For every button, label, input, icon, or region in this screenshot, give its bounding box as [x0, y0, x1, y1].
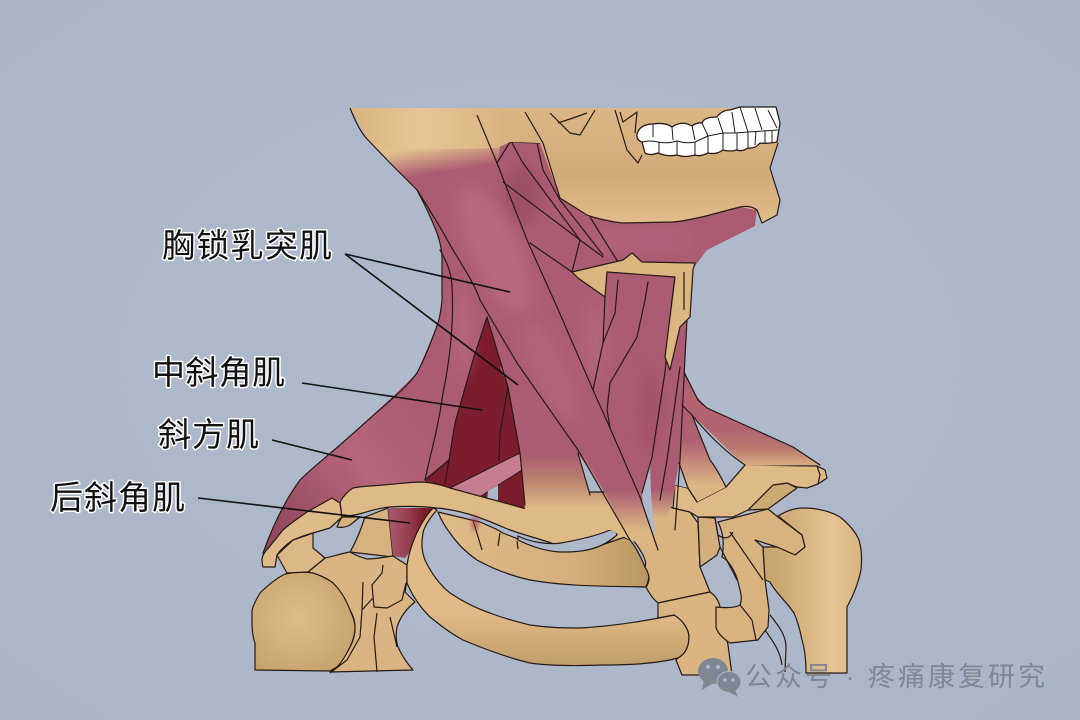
skull to muscle fade: [378, 147, 500, 190]
outline: right trapezius: [698, 400, 820, 465]
thyroid inner line: [683, 272, 685, 310]
outline: digastric group: [497, 142, 618, 272]
outline: SCM front: [497, 163, 658, 550]
pointer: sternocleidomastoid upper: [345, 254, 510, 292]
bone: sternal column upper: [625, 500, 710, 603]
bone: left scapula process: [308, 552, 415, 672]
pointer: posterior scalene: [198, 498, 410, 523]
bone: right band and lower rib: [716, 509, 805, 643]
rib band lines: [715, 518, 763, 640]
bone: right clavicle: [673, 465, 827, 517]
bone: acromion: [262, 498, 342, 567]
muscle: strap strip fade: [642, 372, 685, 538]
bone: hyoid and thyroid cartilage: [572, 253, 695, 370]
bone: first rib: [438, 512, 649, 587]
scapula detail lines: [330, 565, 406, 673]
first rib hash lines: [473, 520, 518, 550]
gap: right triangle: [692, 415, 745, 487]
outline: neck and trapezius outer: [263, 190, 442, 553]
muscles behind bones: [262, 135, 757, 562]
gap: small triangle near clavicle: [675, 463, 688, 488]
outline: splenius: [425, 250, 453, 480]
bone: left humeral head: [252, 572, 355, 671]
bone: second rib: [407, 508, 689, 666]
label: posterior scalene: 后斜角肌: [50, 479, 185, 516]
pointer: sternocleidomastoid lower: [345, 254, 518, 385]
muscle outlines: [263, 142, 820, 553]
bone: clavicle: [340, 482, 632, 550]
head: [350, 107, 780, 370]
pointer: trapezius: [272, 440, 352, 460]
outline: gap right triangle: [679, 415, 745, 502]
icon: wechat watermark: [698, 658, 741, 697]
muscle: dark red triangle low: [425, 460, 449, 492]
bone: right humerus: [763, 508, 862, 673]
label: trapezius: 斜方肌: [158, 416, 259, 453]
label: middle scalene: 中斜角肌: [152, 354, 285, 391]
watermark text: 公众号 · 疼痛康复研究: [745, 662, 1045, 692]
gap: slivers near first rib: [482, 523, 500, 535]
bone: scapular strip: [350, 508, 393, 557]
gap: sliver between clavicle and first rib: [518, 530, 617, 552]
outline: head: [350, 108, 780, 223]
small lower ligament lines: [765, 615, 786, 672]
soft muscle light and dark patches: [458, 168, 662, 431]
bone: manubrium lower: [658, 592, 732, 675]
muscle: second band right: [679, 405, 726, 502]
teeth: [637, 107, 780, 156]
muscle: middle scalene dark red: [437, 317, 525, 510]
outline: dark red edges: [425, 317, 525, 505]
label: sternocleidomastoid: 胸锁乳突肌: [162, 227, 332, 264]
skull socket and ramus lines: [550, 110, 642, 163]
gap: narrow sliver by sternum: [642, 462, 655, 538]
bones group: [252, 465, 862, 675]
bone: mandible: [505, 108, 780, 223]
neck anatomy illustration: [50, 106, 1044, 697]
muscle: trapezius right: [682, 380, 820, 466]
outline: SCM rear: [417, 190, 630, 540]
muscle: anterior scalene pink band: [450, 453, 522, 498]
outline: strap muscles: [593, 277, 698, 530]
outline: clavicular gap lines: [578, 453, 604, 495]
bone: left clavicle piece: [337, 517, 360, 527]
pointer lines: [198, 254, 518, 523]
bone: under clavicle wedge: [748, 483, 797, 510]
pointer: middle scalene: [302, 383, 482, 410]
muscle: posterior scalene: [388, 508, 437, 558]
tooth divisions: [642, 107, 778, 155]
muscle: neck base: [262, 135, 757, 562]
muscle: clavicular head fade: [500, 363, 630, 540]
gap: clavicular triangle: [578, 453, 604, 492]
red tint on rib: [471, 515, 479, 531]
bone: left process under acromion: [277, 533, 325, 573]
bone: skull back: [350, 108, 510, 150]
trapezius left fill: [262, 300, 452, 562]
clavicle tip divider: [817, 466, 820, 484]
muscle fades over bone: [442, 165, 820, 550]
bone: right rib mass: [698, 517, 720, 567]
muscle: sternal head fade: [517, 307, 658, 550]
gap behind pink band: [487, 485, 498, 502]
